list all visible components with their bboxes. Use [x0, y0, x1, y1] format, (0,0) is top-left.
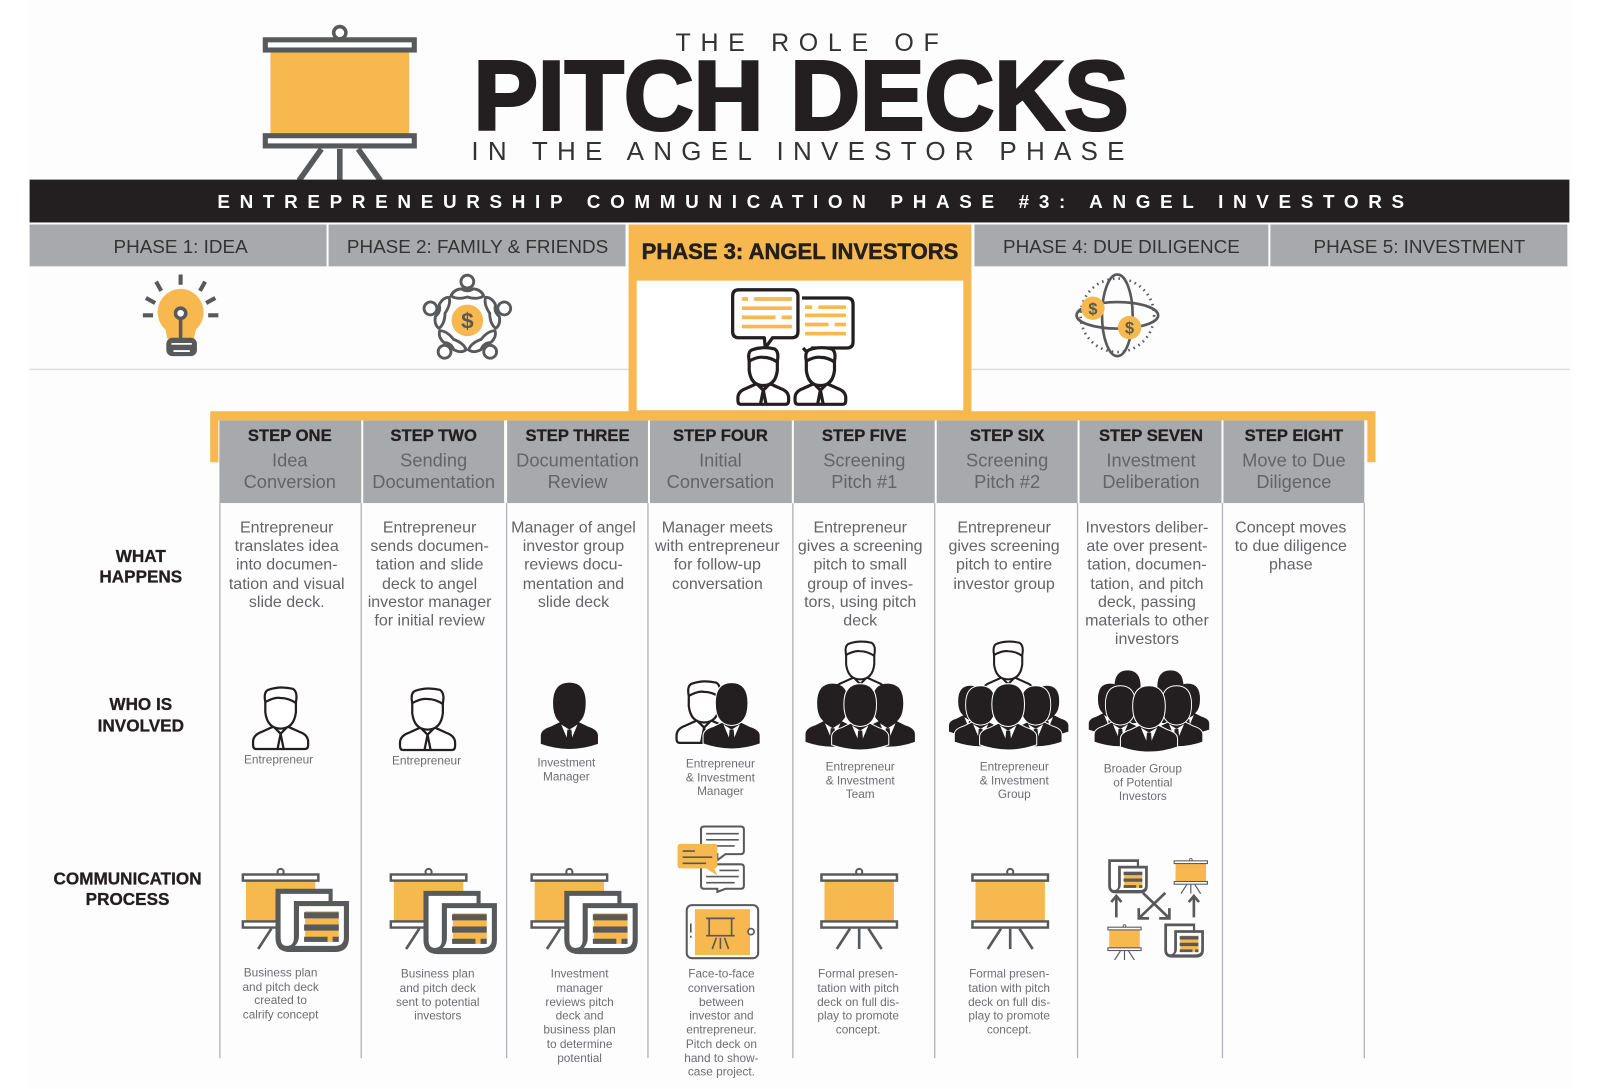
step one: deck and plan: and pitch deck	[242, 980, 319, 994]
step five: entrepreneur and team	[806, 642, 915, 801]
step three: deck and plan: Investment	[551, 967, 609, 981]
step two header	[363, 420, 504, 503]
banner	[30, 180, 1569, 222]
step seven text: tation, and pitch	[1090, 575, 1203, 593]
step six text	[948, 519, 1060, 593]
step seven: broader group: Broader Group	[1104, 761, 1182, 775]
step six: formal presentation: concept.	[987, 1023, 1032, 1037]
label: who is involved	[98, 694, 184, 736]
phase 3 tab highlighted: PHASE 3: ANGEL INVESTORS	[642, 239, 958, 264]
icon: globe with money: $	[1125, 320, 1134, 338]
step one: deck and plan: created to	[254, 993, 307, 1007]
label: who is involved: INVOLVED	[98, 716, 184, 736]
step two: deck and plan: Business plan	[401, 967, 475, 981]
step five: formal presentation: deck on full dis-	[817, 995, 899, 1009]
step eight text: Concept moves	[1235, 519, 1346, 537]
step three text: investor group	[523, 537, 624, 555]
step three: investment manager	[537, 683, 598, 784]
step two text: Entrepreneur	[383, 519, 477, 537]
step four: entrepreneur and manager	[677, 681, 760, 798]
icon: people around money: $	[461, 309, 474, 334]
step six: formal presentation: Formal presen-	[969, 967, 1049, 981]
label: what happens: HAPPENS	[99, 567, 182, 587]
step one header: Idea	[272, 449, 308, 470]
step seven text: tation, documen-	[1087, 555, 1207, 573]
title: PITCH DECKS	[473, 41, 1129, 151]
step four: entrepreneur and manager: Entrepreneur	[686, 756, 755, 770]
step three header: Review	[548, 471, 608, 492]
step five: formal presentation: concept.	[836, 1023, 881, 1037]
step seven: broader group	[1089, 670, 1209, 803]
phase 1 tab	[30, 225, 327, 266]
label: what happens	[99, 546, 182, 587]
step five header: Pitch #1	[831, 471, 897, 492]
step four: conversation and tablet: hand to show-	[684, 1051, 759, 1065]
step one text: translates idea	[235, 537, 339, 555]
step two: deck and plan	[391, 869, 497, 1022]
label: communication process	[54, 869, 202, 909]
step five: entrepreneur and team: & Investment	[826, 774, 895, 788]
step six: entrepreneur and group: Entrepreneur	[980, 759, 1049, 773]
phase 3 tab highlighted	[629, 225, 971, 413]
step five text: gives a screening	[798, 537, 923, 555]
step five: entrepreneur and team: Entrepreneur	[826, 759, 895, 773]
step five text: deck	[843, 612, 878, 630]
step five text: pitch to small	[813, 555, 907, 573]
step two text: tation and slide	[376, 555, 484, 573]
step six: entrepreneur and group: Group	[998, 787, 1031, 801]
step eight text: phase	[1269, 555, 1313, 573]
left speech bubble	[733, 290, 798, 348]
step two text: deck to angel	[382, 575, 477, 593]
step two text: sends documen-	[370, 537, 489, 555]
step three text: slide deck	[538, 593, 610, 611]
step one header: Conversion	[244, 471, 336, 492]
phase 5 tab	[1270, 225, 1567, 266]
icon: two people conversing	[733, 290, 853, 404]
step five text: Entrepreneur	[813, 519, 908, 537]
step three: investment manager: Manager	[543, 770, 590, 784]
step seven: broader group: Investors	[1119, 789, 1167, 803]
step one text: Entrepreneur	[240, 519, 334, 537]
step two: entrepreneur	[392, 688, 461, 767]
step two header: STEP TWO	[390, 426, 477, 445]
step six: entrepreneur and group: & Investment	[980, 774, 1050, 788]
step three text	[511, 519, 636, 611]
divider line	[30, 368, 1569, 370]
title: IN THE ANGEL INVESTOR PHASE	[471, 136, 1124, 166]
step seven: sharing materials diagram	[1108, 858, 1207, 960]
step five: formal presentation: Formal presen-	[818, 967, 898, 981]
step three: deck and plan: reviews pitch	[545, 995, 614, 1009]
step four: conversation and tablet: investor and	[689, 1008, 754, 1022]
step five: formal presentation	[817, 869, 899, 1037]
step seven text: investors	[1115, 630, 1179, 648]
step eight header: Diligence	[1256, 471, 1331, 492]
step one: deck and plan: Business plan	[244, 966, 317, 980]
step seven header: Deliberation	[1102, 471, 1200, 492]
icon: globe with money	[1077, 275, 1158, 356]
phase tabs	[30, 225, 1567, 413]
step one: entrepreneur: Entrepreneur	[244, 752, 313, 766]
step four header: Conversation	[667, 471, 774, 492]
step four: conversation and tablet: between	[699, 995, 744, 1009]
step three text: Manager of angel	[511, 519, 636, 537]
step eight header	[1223, 420, 1364, 503]
step four text	[654, 519, 780, 593]
step one text	[229, 519, 345, 611]
phase 2 tab	[329, 225, 626, 266]
label: what happens: WHAT	[116, 546, 166, 566]
step seven text: materials to other	[1085, 612, 1209, 630]
step six: formal presentation: deck on full dis-	[968, 995, 1050, 1009]
step five: formal presentation: tation with pitch	[817, 981, 899, 995]
step two header: Documentation	[372, 471, 495, 492]
step four: conversation and tablet: Pitch deck on	[686, 1037, 757, 1051]
step two: deck and plan: sent to potential	[396, 995, 480, 1009]
step four: conversation and tablet: entrepreneur.	[686, 1023, 757, 1037]
icon: chat bubbles	[678, 827, 744, 892]
banner: ENTREPRENEURSHIP COMMUNICATION PHASE #3: ANGEL INVESTORS	[217, 191, 1404, 212]
step seven: broader group: of Potential	[1113, 776, 1172, 790]
step seven header: STEP SEVEN	[1099, 426, 1203, 445]
icon: tablet with presentation	[687, 905, 758, 958]
communication process	[242, 827, 1207, 1079]
icon: light bulb	[143, 275, 218, 356]
step six header: STEP SIX	[970, 426, 1044, 445]
phase 2 tab: PHASE 2: FAMILY & FRIENDS	[347, 236, 608, 257]
step one: deck and plan	[242, 869, 349, 1021]
step six text: Entrepreneur	[957, 519, 1051, 537]
step six header: Screening	[966, 449, 1048, 470]
step five: entrepreneur and team: Team	[846, 787, 875, 801]
step seven text	[1085, 519, 1209, 648]
step two text: investor manager	[368, 593, 492, 611]
step three: deck and plan	[532, 869, 638, 1065]
step six: formal presentation: tation with pitch	[968, 981, 1050, 995]
icon: presentation board	[265, 27, 414, 181]
step column headers	[219, 420, 1364, 503]
step four text: with entrepreneur	[654, 537, 780, 555]
step four: entrepreneur and manager: Manager	[697, 784, 744, 798]
step one text: slide deck.	[249, 593, 325, 611]
step six text: investor group	[953, 575, 1055, 593]
step four: conversation and tablet: case project.	[688, 1065, 755, 1079]
step three: deck and plan: deck and	[556, 1008, 604, 1022]
step seven header: Investment	[1106, 449, 1196, 470]
step eight text: to due diligence	[1235, 537, 1347, 555]
step two: deck and plan: and pitch deck	[400, 981, 476, 995]
step one text: into documen-	[236, 555, 337, 573]
step five: formal presentation: play to promote	[817, 1008, 899, 1022]
column grid lines	[220, 503, 1364, 1058]
step seven text: deck, passing	[1098, 593, 1196, 611]
step three: deck and plan: to determine	[547, 1037, 613, 1051]
phase 5 tab: PHASE 5: INVESTMENT	[1314, 236, 1526, 257]
phase 4 tab	[974, 225, 1268, 266]
title: THE ROLE OF	[676, 29, 939, 57]
step six text: pitch to entire	[956, 555, 1052, 573]
step six text: gives screening	[948, 537, 1060, 555]
what happens descriptions	[229, 519, 1347, 648]
step six: formal presentation	[968, 869, 1050, 1037]
step seven header	[1080, 420, 1221, 503]
label: who is involved: WHO IS	[109, 694, 172, 714]
step five text: tors, using pitch	[804, 593, 916, 611]
step four text: for follow-up	[674, 555, 761, 573]
step four text: Manager meets	[662, 519, 773, 537]
step six: entrepreneur and group	[949, 642, 1068, 801]
label: communication process: COMMUNICATION	[54, 869, 202, 889]
step one: deck and plan: calrify concept	[243, 1007, 319, 1021]
step four header: STEP FOUR	[673, 426, 768, 445]
step one header	[219, 420, 361, 503]
step one: entrepreneur	[244, 687, 313, 766]
step three text: reviews docu-	[524, 555, 623, 573]
step three header	[507, 420, 648, 503]
who is involved	[244, 642, 1209, 803]
step five text: group of inves-	[807, 575, 913, 593]
step two: deck and plan: investors	[414, 1008, 461, 1022]
step three header: Documentation	[516, 449, 639, 470]
step two: entrepreneur: Entrepreneur	[392, 753, 461, 767]
step three: deck and plan: business plan	[543, 1023, 616, 1037]
phase 1 tab: PHASE 1: IDEA	[114, 236, 248, 257]
step one text: tation and visual	[229, 575, 345, 593]
step six: formal presentation: play to promote	[968, 1008, 1050, 1022]
step five text	[798, 519, 923, 630]
step one header: STEP ONE	[248, 426, 332, 445]
step four: conversation and tablet: Face-to-face	[688, 967, 755, 981]
step six header: Pitch #2	[974, 471, 1040, 492]
step four header	[650, 420, 792, 503]
icon: people around money	[419, 275, 515, 367]
step seven text: Investors deliber-	[1086, 519, 1208, 537]
step three: deck and plan: potential	[557, 1051, 602, 1065]
orange bracket over steps	[210, 411, 1376, 462]
person right	[795, 348, 846, 404]
step five header: STEP FIVE	[822, 426, 907, 445]
right speech bubble	[802, 298, 853, 359]
step two text: for initial review	[374, 612, 485, 630]
icon: globe with money: $	[1088, 300, 1097, 318]
step three: investment manager: Investment	[537, 755, 596, 769]
step three text: mentation and	[523, 575, 624, 593]
phase 4 tab: PHASE 4: DUE DILIGENCE	[1003, 236, 1240, 257]
step eight header: STEP EIGHT	[1245, 426, 1343, 445]
step seven text: ate over present-	[1086, 537, 1207, 555]
step eight header: Move to Due	[1242, 449, 1346, 470]
step eight text	[1235, 519, 1347, 573]
step four: conversation and tablet: conversation	[688, 981, 755, 995]
step four text: conversation	[672, 575, 763, 593]
step six header	[937, 420, 1078, 503]
step two header: Sending	[400, 449, 467, 470]
step three: deck and plan: manager	[556, 981, 603, 995]
step four: entrepreneur and manager: & Investment	[686, 771, 756, 785]
step four header: Initial	[699, 449, 742, 470]
step five header: Screening	[823, 449, 905, 470]
step four: conversation and tablet	[678, 827, 759, 1079]
step five header	[794, 420, 935, 503]
person left	[738, 348, 789, 404]
label: communication process: PROCESS	[86, 889, 169, 909]
step three header: STEP THREE	[526, 426, 630, 445]
step two text	[368, 519, 492, 630]
row labels	[54, 546, 202, 909]
